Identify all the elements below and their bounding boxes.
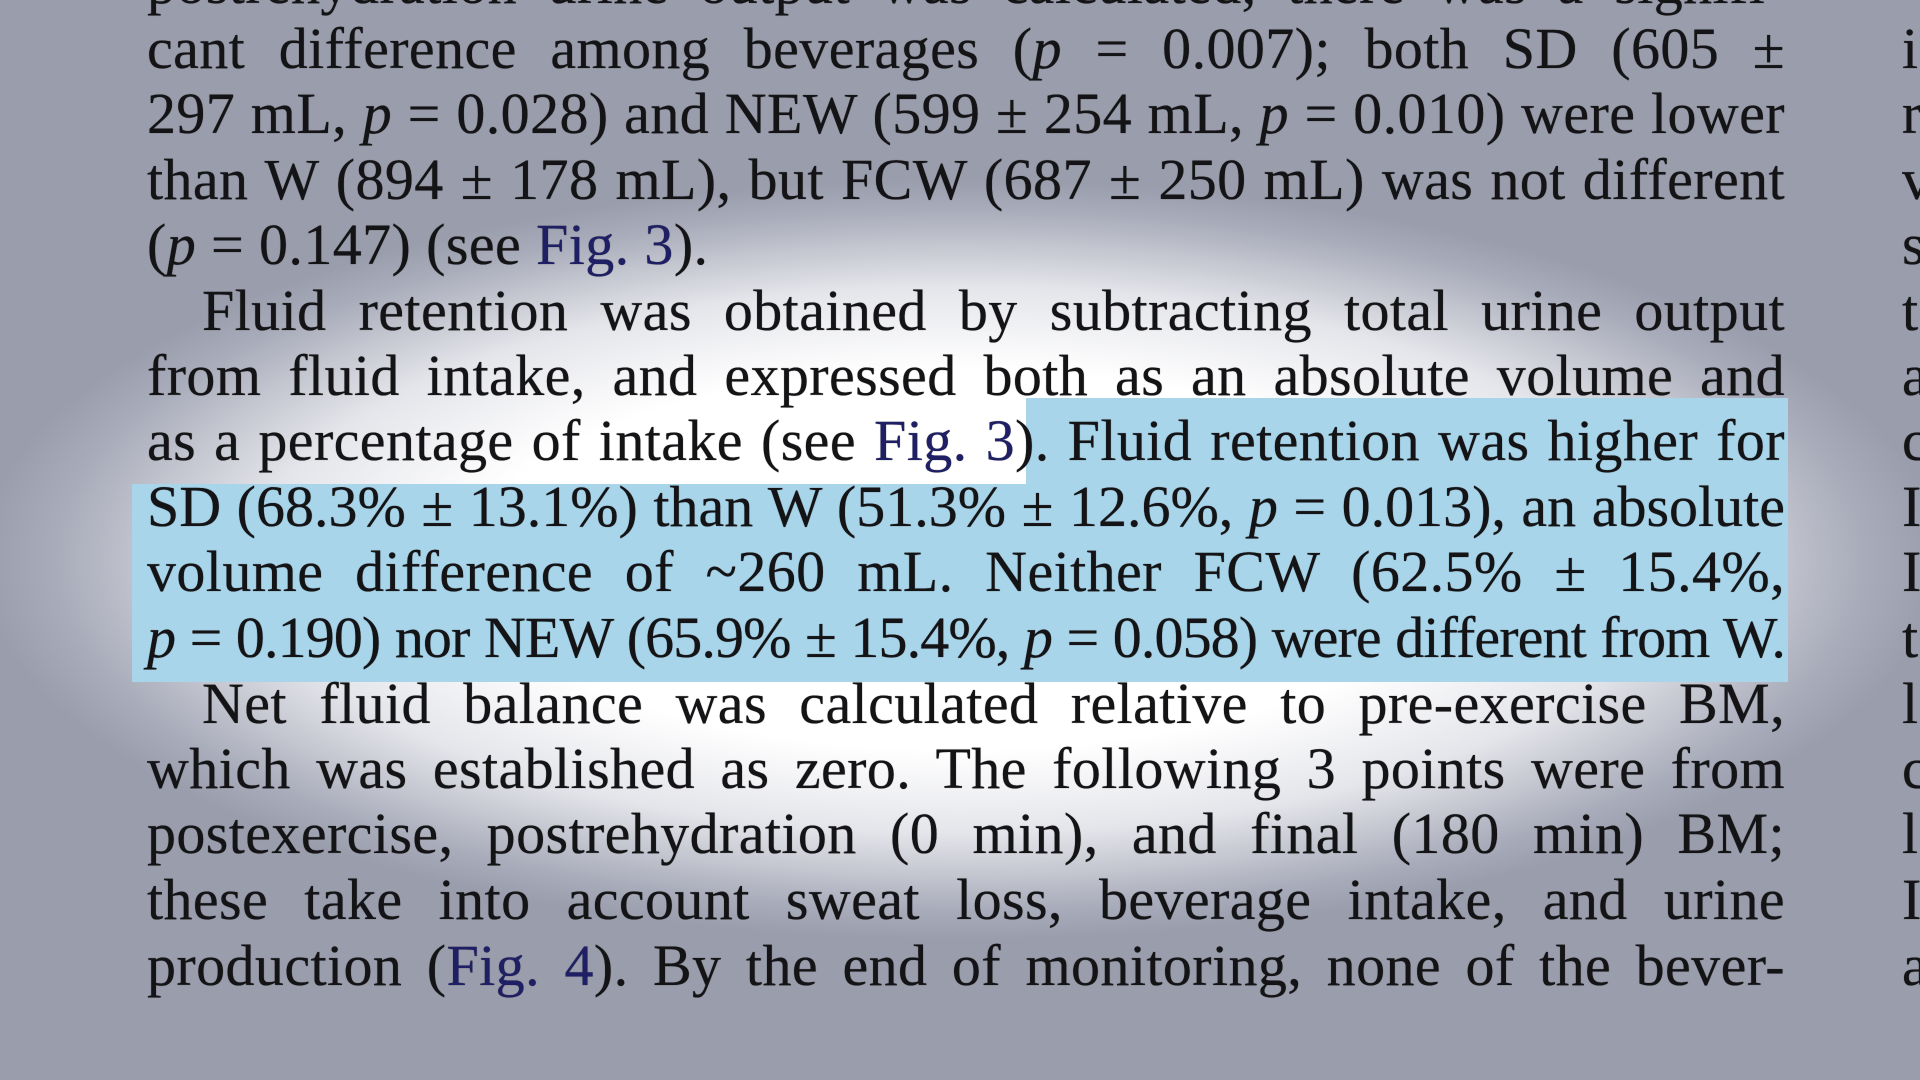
text column: volume difference of ~260 mL. Neither FCW (62.5% ± 15.4%, (147, 539, 1785, 604)
right column partial letters: l (1902, 801, 1918, 866)
highlight: fluid retention sentence (1026, 398, 1788, 484)
right column partial letters: i (1902, 16, 1918, 81)
right column partial letters: t (1902, 278, 1918, 343)
text column: from fluid intake, and expressed both as an absolute volume and (147, 343, 1785, 408)
text column: Net fluid balance was calculated relative to pre-exercise BM, (202, 671, 1785, 736)
text column: postexercise, postrehydration (0 min), and final (180 min) BM; (147, 801, 1785, 866)
text column: SD (68.3% ± 13.1%) than W (51.3% ± 12.6%, p = 0.013), an absolute (147, 474, 1785, 539)
text column: production (Fig. 4). By the end of monitoring, none of the bever- (147, 933, 1785, 998)
text column: p = 0.190) nor NEW (65.9% ± 15.4%, p = 0.058) were different from W. (147, 605, 1785, 670)
text column: than W (894 ± 178 mL), but FCW (687 ± 250 mL) was not different (147, 147, 1785, 212)
right column partial letters: l (1902, 671, 1918, 736)
text column: cant difference among beverages (p = 0.007); both SD (605 ± (147, 16, 1785, 81)
text column: which was established as zero. The following 3 points were from (147, 736, 1785, 801)
text column: these take into account sweat loss, beverage intake, and urine (147, 867, 1785, 932)
text column: (p = 0.147) (see Fig. 3). (147, 212, 708, 277)
right column partial letters: t (1902, 605, 1918, 670)
highlight: block lines (132, 484, 1788, 682)
text column: 297 mL, p = 0.028) and NEW (599 ± 254 mL, p = 0.010) were lower (147, 81, 1785, 146)
text column: Fluid retention was obtained by subtracting total urine output (202, 278, 1785, 343)
text column: as a percentage of intake (see Fig. 3). Fluid retention was higher for (147, 408, 1785, 473)
right column partial letters (1902, 16, 1920, 998)
